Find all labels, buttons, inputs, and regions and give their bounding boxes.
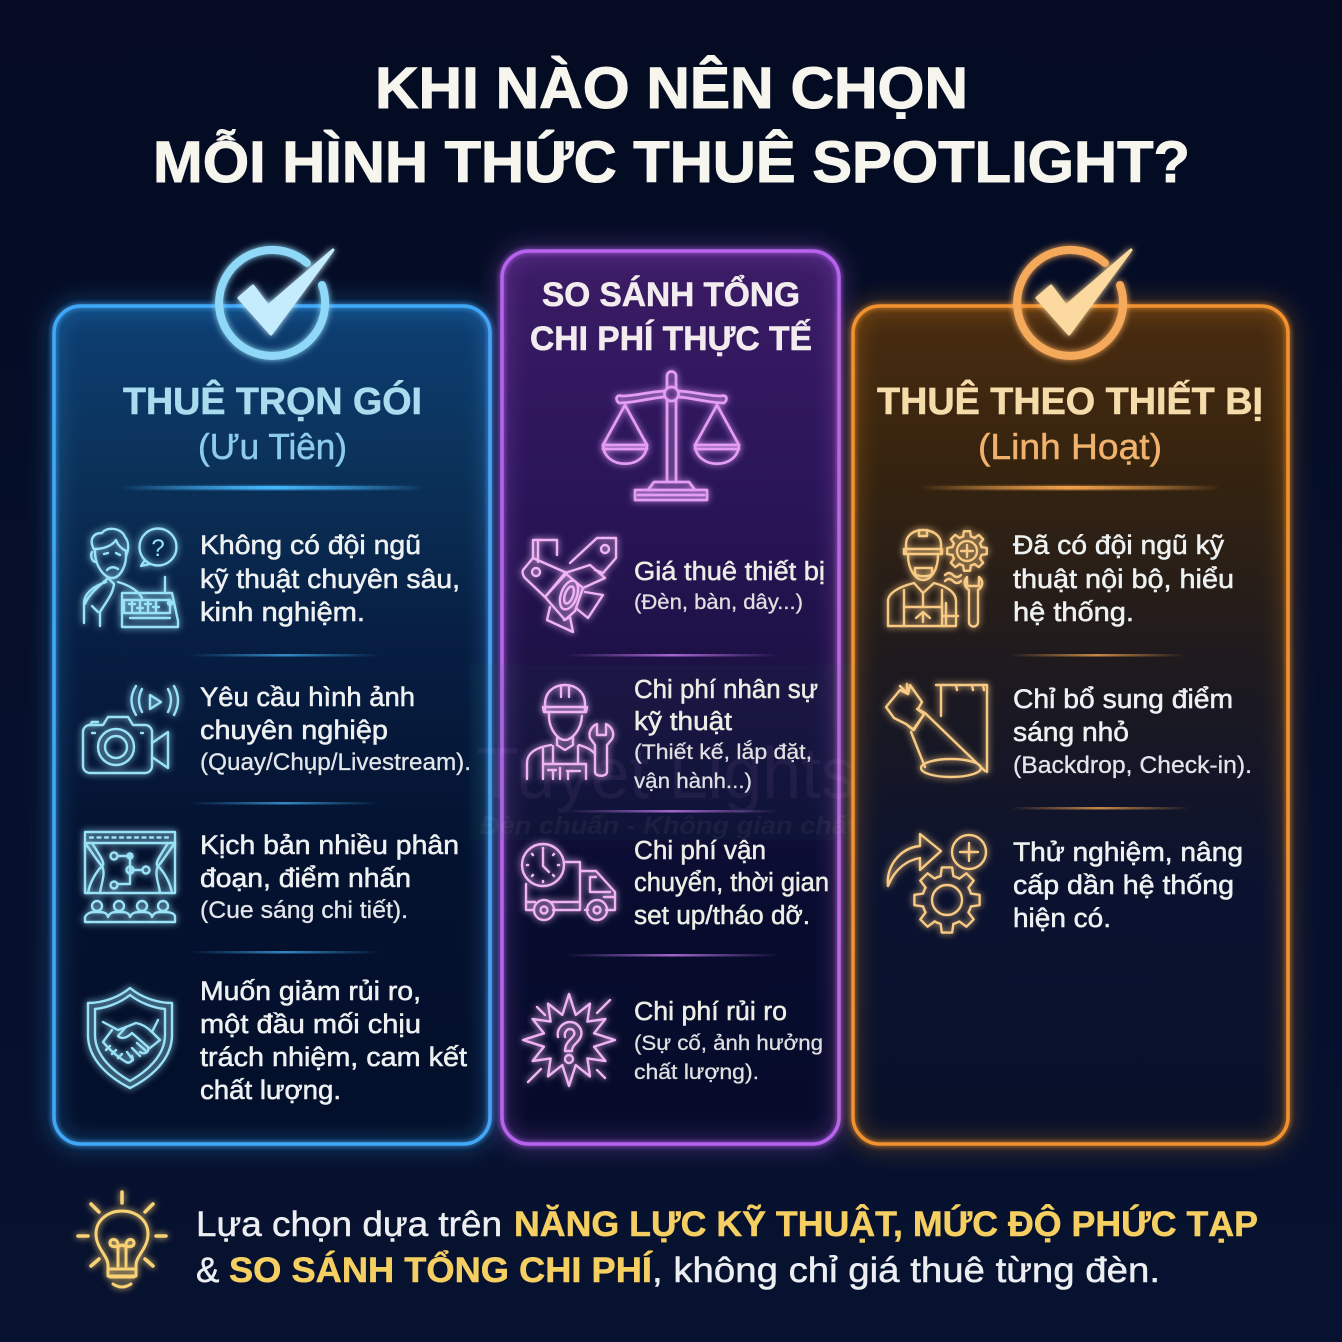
icon: blue check circle — [219, 250, 333, 356]
heading: so sánh tổng chi phí thực tế: CHI PHÍ THỰC TẾ — [530, 320, 812, 358]
icon: shield with handshake — [88, 988, 172, 1088]
divider purple 1 — [565, 654, 780, 656]
divider blue header — [120, 486, 425, 490]
panel: so sánh tổng chi phí — [470, 250, 862, 1145]
text: small highlights: sáng nhỏ — [1013, 717, 1129, 747]
icon: burst with question mark — [523, 994, 615, 1086]
text: equipment rental: Giá thuê thiết bị — [634, 558, 825, 586]
text: complex script: đoạn, điểm nhấn — [200, 863, 411, 893]
watermark: Tuyet Lights — [476, 734, 856, 814]
text: reduce risk: trách nhiệm, cam kết — [200, 1042, 468, 1072]
text: reduce risk: Muốn giảm rủi ro, — [200, 976, 421, 1006]
text: has technical team: Đã có đội ngũ kỹ — [1013, 530, 1225, 560]
divider orange 2 — [1010, 807, 1190, 810]
text: labour cost: (Thiết kế, lắp đặt, — [634, 739, 812, 764]
title: KHI NÀO NÊN CHỌN — [375, 56, 968, 121]
heading: thuê trọn gói — [123, 379, 422, 467]
text: test and upgrade: Thử nghiệm, nâng — [1013, 837, 1243, 867]
text: no technical team: kinh nghiệm. — [200, 597, 365, 627]
text: professional image: Yêu cầu hình ảnh — [200, 682, 415, 712]
text: risk cost: Chi phí rủi ro — [634, 998, 787, 1026]
panel background blue — [53, 305, 491, 1145]
panel: thuê trọn gói — [53, 250, 491, 1145]
divider blue 3 — [190, 951, 380, 954]
text: risk cost — [634, 998, 823, 1084]
bottom conclusion: , không chỉ giá thuê từng đèn. — [652, 1251, 1160, 1290]
watermark: Đèn chuẩn - Không gian chất — [480, 812, 858, 840]
text: equipment rental — [634, 558, 825, 614]
icon: confused person with console — [84, 528, 178, 627]
text: reduce risk: chất lượng. — [200, 1075, 341, 1105]
divider purple 2 — [565, 810, 780, 812]
title — [153, 56, 1190, 195]
icon: upgrade arrow with gear — [888, 834, 986, 933]
text: has technical team: thuật nội bộ, hiểu — [1013, 564, 1234, 594]
icon: light bulb — [78, 1192, 166, 1287]
icon: stage light with price tag — [523, 538, 616, 632]
bottom conclusion: & — [196, 1251, 219, 1290]
icon: technician with wrench — [527, 685, 613, 779]
text: test and upgrade — [1013, 837, 1243, 933]
heading: so sánh tổng chi phí thực tế: SO SÁNH TỔNG — [542, 276, 800, 314]
text: transport cost: set up/tháo dỡ. — [634, 902, 810, 930]
panel border blue — [54, 306, 490, 1144]
bottom conclusion: Lựa chọn dựa trên — [196, 1205, 502, 1244]
icon: delivery truck with clock — [522, 844, 615, 920]
text: professional image: chuyên nghiệp — [200, 715, 388, 745]
text: labour cost: kỹ thuật — [634, 708, 732, 736]
text: reduce risk: một đầu mối chịu — [200, 1009, 421, 1039]
icon: engineer with gear and wrench — [888, 530, 987, 626]
text: labour cost: Chi phí nhân sự — [634, 676, 818, 704]
text: risk cost: (Sự cố, ảnh hưởng — [634, 1031, 823, 1055]
text: small highlights — [1013, 684, 1252, 779]
heading: thuê theo thiết bị — [877, 379, 1263, 467]
heading: thuê trọn gói: THUÊ TRỌN GÓI — [123, 379, 422, 423]
text: test and upgrade: cấp dần hệ thống — [1013, 870, 1234, 900]
icon: camera with video and signal — [83, 686, 178, 773]
panel: thuê theo thiết bị — [852, 250, 1289, 1145]
text: transport cost: chuyển, thời gian — [634, 869, 829, 897]
divider blue 1 — [190, 654, 380, 656]
panel background purple — [501, 250, 840, 1145]
text: labour cost: vận hành...) — [634, 769, 752, 793]
heading: thuê theo thiết bị: (Linh Hoạt) — [978, 426, 1162, 467]
text: no technical team: kỹ thuật chuyên sâu, — [200, 564, 460, 594]
text: labour cost — [634, 676, 818, 793]
divider blue 2 — [190, 802, 380, 804]
text: reduce risk — [200, 976, 468, 1105]
heading: thuê trọn gói: (Ưu Tiên) — [198, 426, 347, 467]
text: small highlights: (Backdrop, Check-in). — [1013, 752, 1252, 779]
panel border orange — [853, 306, 1288, 1144]
icon: light and backdrop — [886, 684, 987, 777]
text: has technical team — [1013, 530, 1234, 627]
text: complex script: Kịch bản nhiều phân — [200, 830, 459, 860]
text: transport cost — [634, 837, 829, 930]
text: no technical team: Không có đội ngũ — [200, 530, 421, 560]
watermark — [470, 665, 862, 840]
bottom conclusion — [196, 1204, 1258, 1290]
icon: stage with curtains and audience — [85, 832, 175, 922]
bottom conclusion: SO SÁNH TỔNG CHI PHÍ — [229, 1250, 653, 1290]
text: complex script — [200, 830, 459, 924]
divider orange header — [920, 486, 1220, 490]
icon: orange check circle — [1017, 250, 1131, 356]
title: MỖI HÌNH THỨC THUÊ SPOTLIGHT? — [153, 130, 1190, 195]
text: small highlights: Chỉ bổ sung điểm — [1013, 684, 1233, 714]
text: complex script: (Cue sáng chi tiết). — [200, 897, 408, 924]
text: professional image: (Quay/Chụp/Livestream). — [200, 749, 471, 776]
heading: so sánh tổng chi phí thực tế — [530, 276, 812, 358]
text: risk cost: chất lượng). — [634, 1060, 759, 1084]
divider purple 3 — [565, 954, 780, 956]
text: no technical team — [200, 530, 460, 627]
text: equipment rental: (Đèn, bàn, dây...) — [634, 590, 803, 614]
bottom conclusion: NĂNG LỰC KỸ THUẬT, MỨC ĐỘ PHỨC TẠP — [514, 1204, 1258, 1244]
divider orange 1 — [1010, 654, 1185, 656]
text: has technical team: hệ thống. — [1013, 597, 1134, 627]
text: test and upgrade: hiện có. — [1013, 903, 1111, 933]
panel background orange — [852, 305, 1289, 1145]
icon: balance scale — [603, 372, 739, 500]
text: professional image — [200, 682, 471, 776]
icon: question mark in bubble: ? — [151, 535, 165, 562]
heading: thuê theo thiết bị: THUÊ THEO THIẾT BỊ — [877, 379, 1263, 423]
text: transport cost: Chi phí vận — [634, 837, 766, 865]
panel border purple — [502, 251, 839, 1144]
